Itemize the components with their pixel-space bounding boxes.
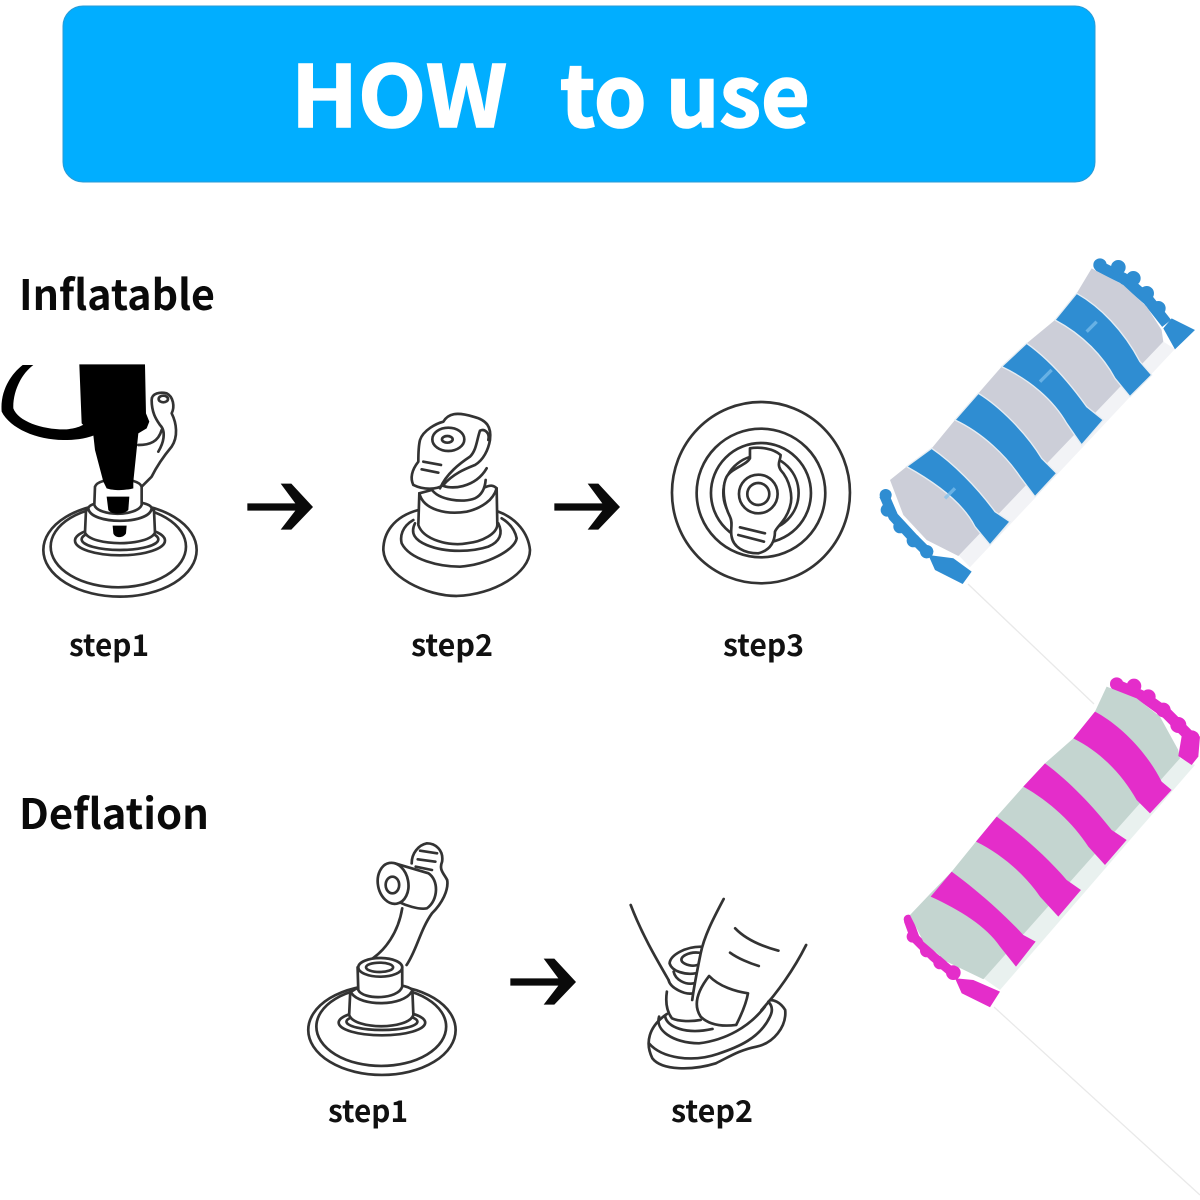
label: inflate step2: step2 — [411, 621, 493, 665]
icon: deflate step 2, finger pressing valve — [631, 899, 806, 1068]
arrow: deflate step 1 to step 2 — [510, 959, 576, 1005]
icon: inflate step 3, valve top view — [672, 402, 850, 583]
illustration: blue striped float pillow — [880, 258, 1195, 584]
label: deflate step2: step2 — [671, 1087, 753, 1131]
label: inflate step1: step1 — [69, 621, 149, 665]
illustration: pink striped float pillow — [904, 677, 1200, 1007]
heading: Inflatable: Inflatable — [19, 262, 215, 323]
arrow: step 1 to step 2 — [247, 484, 313, 530]
title banner: HOW — [291, 29, 507, 152]
title banner — [63, 6, 1095, 182]
arrow: step 2 to step 3 — [554, 484, 620, 530]
label: inflate step3: step3 — [723, 621, 804, 665]
sheet edges of the floats — [968, 584, 1200, 1195]
label: deflate step1: step1 — [328, 1087, 408, 1131]
heading: Deflation: Deflation — [19, 781, 209, 842]
icon: inflate step 2, valve with closed cap — [383, 414, 530, 596]
icon: inflate step 1, pump nozzle in valve — [1, 364, 197, 597]
title banner: to use — [560, 29, 810, 152]
icon: deflate step 1, open valve with cap — [308, 843, 456, 1075]
